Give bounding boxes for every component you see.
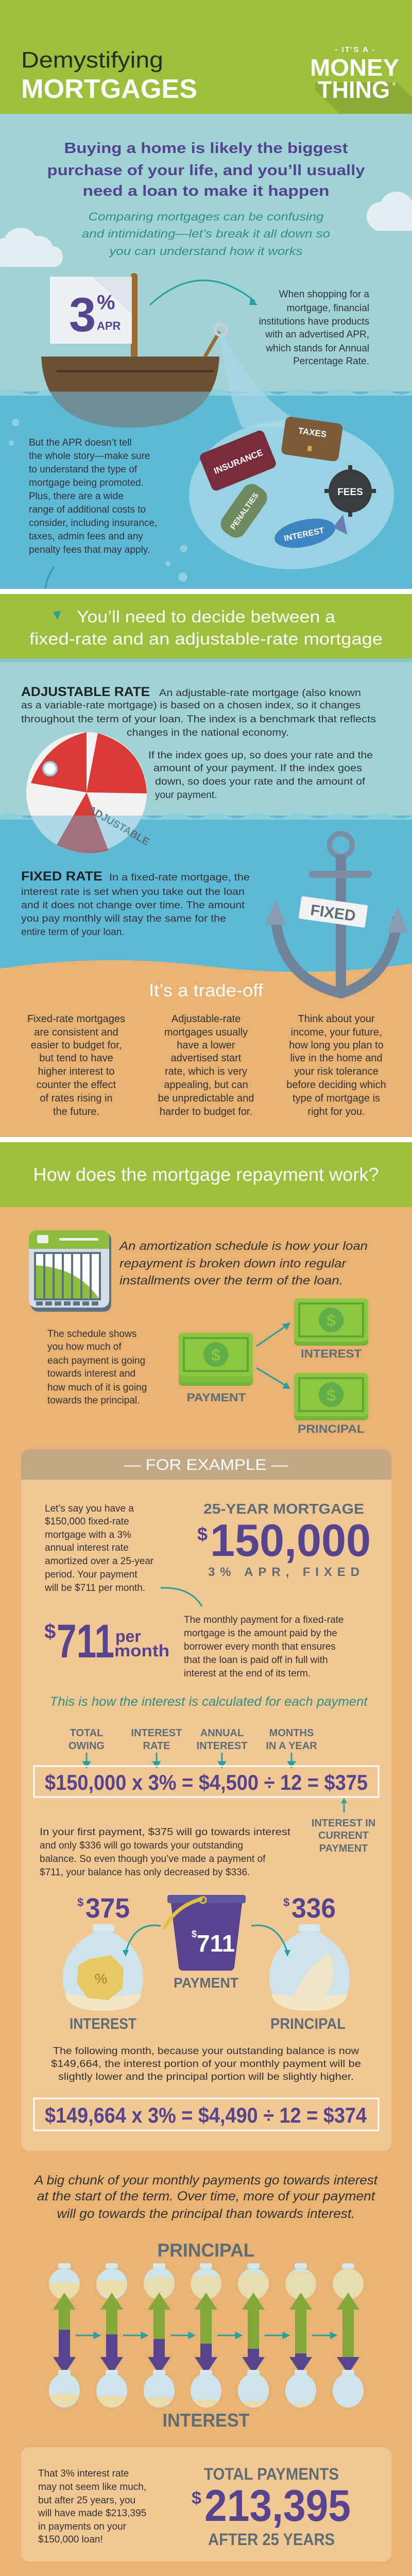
text: fixed rate: and it does not change over time. The amount bbox=[21, 900, 245, 911]
trade-off columns: harder to budget for. bbox=[160, 1106, 252, 1117]
text: APR definition: mortgage, financial bbox=[286, 303, 369, 314]
subtitle: you can understand how it works bbox=[108, 245, 302, 258]
subtitle: and intimidating—let’s break it all down so bbox=[82, 227, 330, 240]
text: monthly payment definition: mortgage is the amount paid by the bbox=[184, 1628, 337, 1639]
heading: trade-off: It’s a trade-off bbox=[149, 981, 264, 1001]
text: APR definition: Percentage Rate. bbox=[293, 356, 369, 367]
text: APR caveat: Plus, there are a wide bbox=[29, 491, 124, 502]
panel: total payments: may not seem like much, bbox=[38, 2482, 146, 2493]
panel: total payments: $150,000 loan! bbox=[38, 2534, 103, 2545]
diagram: bucket split into jars: $ bbox=[283, 1896, 289, 1909]
text: big chunk goes to interest bbox=[33, 2173, 378, 2221]
trade-off columns: but tend to have bbox=[39, 1053, 113, 1064]
water section bbox=[0, 389, 412, 589]
text: adjustable rate: changes in the national economy. bbox=[127, 727, 289, 738]
trade-off columns: appealing, but can bbox=[164, 1079, 248, 1091]
title bbox=[21, 47, 197, 104]
text: adjustable rate: If the index goes up, so does your rate and the bbox=[148, 750, 373, 761]
text: amortization definition: installments over the term of the loan. bbox=[119, 1274, 343, 1287]
text: APR caveat: taxes, admin fees and any bbox=[29, 531, 143, 542]
trade-off columns bbox=[27, 1013, 386, 1117]
icon: anchor with FIXED sign: FIXED bbox=[310, 902, 357, 925]
arrow + label: interest in current payment: INTEREST IN bbox=[312, 1818, 375, 1829]
formula labels bbox=[68, 1727, 317, 1752]
text: adjustable rate: An adjustable-rate mortgage (also known bbox=[159, 688, 361, 699]
trade-off columns: be unpredictable and bbox=[158, 1093, 254, 1104]
formula labels: TOTAL bbox=[70, 1727, 103, 1739]
formula box 1: $150,000 x 3% = $4,500 ÷ 12 = $375 bbox=[45, 1770, 368, 1794]
stat: 150,000 mortgage: 25-YEAR MORTGAGE bbox=[203, 1501, 364, 1517]
text: first payment: In your first payment, $375 will go towards interest bbox=[40, 1827, 291, 1838]
text: adjustable rate: down, so does your rate and the amount of bbox=[155, 776, 366, 787]
chart: principal vs interest over time: INTEREST bbox=[163, 2410, 250, 2431]
arrow + label: interest in current payment bbox=[312, 1798, 375, 1854]
formula labels: OWING bbox=[68, 1740, 105, 1752]
panel: total payments: AFTER 25 YEARS bbox=[208, 2530, 335, 2549]
panel: total payments: TOTAL PAYMENTS bbox=[204, 2465, 339, 2483]
arrow: to monthly payment bbox=[161, 1588, 202, 1606]
trade-off columns: before deciding which bbox=[286, 1079, 386, 1091]
text: monthly payment definition: The monthly payment for a fixed-rate bbox=[184, 1615, 344, 1625]
diagram: payment splits into interest and principal: PRINCIPAL bbox=[298, 1422, 365, 1435]
panel: total payments: will have made $213,395 bbox=[38, 2508, 146, 2519]
trade-off columns: are consistent and bbox=[34, 1027, 118, 1038]
text: APR caveat: penalty fees that may apply. bbox=[29, 545, 150, 555]
text: APR definition: institutions have products bbox=[259, 316, 369, 327]
band: fixed vs adjustable heading: fixed-rate and an adjustable-rate mortgage bbox=[29, 630, 383, 648]
icon: interest jar bbox=[63, 1924, 143, 2032]
text: monthly payment definition bbox=[184, 1615, 344, 1679]
formula labels: IN A YEAR bbox=[266, 1740, 317, 1752]
text: schedule explanation bbox=[47, 1329, 147, 1406]
trade-off columns: of rates rising in bbox=[40, 1093, 113, 1104]
subtitle bbox=[82, 210, 330, 258]
sky section bbox=[0, 114, 412, 392]
icon: sailboat with 3% APR sail: % bbox=[97, 291, 115, 314]
text: monthly payment definition: borrower every month that ensures bbox=[184, 1641, 336, 1652]
stat: 711 per month: month bbox=[114, 1641, 169, 1660]
trade-off columns: rate, which is very bbox=[165, 1066, 247, 1077]
trade-off columns: mortgages usually bbox=[164, 1027, 248, 1038]
icon: hidden costs bubble bbox=[189, 335, 394, 569]
formula labels: ANNUAL bbox=[200, 1727, 244, 1739]
icon: interest fish bbox=[272, 512, 348, 553]
trade-off columns: right for you. bbox=[307, 1106, 365, 1117]
text: first payment bbox=[40, 1827, 291, 1878]
icon: interest jar: % bbox=[95, 1971, 108, 1987]
chart: principal vs interest over time bbox=[49, 2240, 364, 2431]
text: example setup: Let’s say you have a bbox=[45, 1503, 134, 1514]
formula labels: RATE bbox=[143, 1740, 170, 1752]
trade-off columns: Fixed-rate mortgages bbox=[27, 1013, 125, 1025]
text: example setup: annual interest rate bbox=[45, 1543, 129, 1553]
arrow: down to fixed vs adjustable bbox=[45, 567, 56, 616]
band: repayment heading bbox=[0, 1137, 412, 1207]
text: big chunk goes to interest: at the start of the term. Over time, more of your payment bbox=[37, 2189, 375, 2204]
arrow + label: interest in current payment: CURRENT bbox=[318, 1830, 369, 1841]
text: fixed rate bbox=[21, 869, 250, 938]
text: APR caveat: to understand the type of bbox=[29, 464, 138, 475]
trade-off columns: how long you plan to bbox=[289, 1040, 384, 1051]
logo: It's a Money Thing: - IT'S A - bbox=[335, 45, 376, 54]
text: adjustable rate: amount of your payment. If the index goes bbox=[153, 763, 362, 774]
trade-off columns: Think about your bbox=[298, 1013, 375, 1025]
arrow: sail to APR text bbox=[150, 280, 255, 305]
icon: clouds bbox=[0, 192, 412, 267]
text: APR definition: with an advertised APR, bbox=[265, 329, 369, 340]
text: schedule explanation: towards interest and bbox=[47, 1368, 135, 1379]
diagram: payment splits into interest and principal: INTEREST bbox=[301, 1347, 362, 1360]
text: schedule explanation: how much of it is going bbox=[47, 1382, 147, 1393]
icon: fees mine: FEES bbox=[337, 487, 363, 498]
title: MORTGAGES bbox=[21, 74, 197, 104]
trade-off columns: higher interest to bbox=[38, 1066, 114, 1077]
band: repayment heading: How does the mortgage repayment work? bbox=[33, 1164, 379, 1185]
text: example setup: will be $711 per month. bbox=[44, 1583, 145, 1594]
panel: total payments: but after 25 years, you bbox=[38, 2495, 135, 2506]
stat: 150,000 mortgage: 150,000 bbox=[210, 1515, 371, 1566]
band: fixed vs adjustable heading: You’ll need to decide between a bbox=[77, 607, 335, 626]
panel: total payments: in payments on your bbox=[38, 2521, 127, 2532]
text: adjustable rate: ADJUSTABLE RATE bbox=[21, 685, 150, 699]
panel: total payments: 213,395 bbox=[204, 2481, 351, 2531]
text: adjustable rate: your payment. bbox=[155, 790, 217, 801]
text: fixed rate: you pay monthly will stay the same for the bbox=[21, 913, 226, 924]
headline bbox=[47, 140, 365, 199]
text: big chunk goes to interest: A big chunk of your monthly payments go towards interest bbox=[33, 2173, 378, 2188]
headline: purchase of your life, and you’ll usually bbox=[47, 162, 365, 179]
trade-off columns: your risk tolerance bbox=[294, 1066, 379, 1077]
icon: sailboat with 3% APR sail: APR bbox=[97, 319, 121, 332]
subtitle: Comparing mortgages can be confusing bbox=[89, 210, 324, 223]
diagram: bucket split into jars: 375 bbox=[85, 1893, 130, 1924]
text: APR caveat: But the APR doesn’t tell bbox=[29, 437, 132, 448]
icon: principal jar bbox=[269, 1924, 350, 2032]
text: monthly payment definition: interest at the end of its term. bbox=[184, 1668, 311, 1679]
formula labels: INTEREST bbox=[131, 1727, 182, 1739]
text: monthly payment definition: that the loan is paid off in full with bbox=[184, 1655, 328, 1666]
stat: 711 per month: $ bbox=[44, 1620, 56, 1643]
headline: need a loan to make it happen bbox=[82, 183, 330, 199]
logo: It's a Money Thing: THING bbox=[318, 76, 390, 103]
text: schedule explanation: you how much of bbox=[47, 1342, 122, 1352]
text: following month: The following month, because your outstanding balance is now bbox=[53, 2046, 359, 2057]
icon: beach ball: ADJUSTABLE bbox=[87, 804, 151, 848]
panel: for example bbox=[21, 1449, 391, 2151]
icon: bucket bbox=[164, 1895, 246, 1991]
text: amortization definition bbox=[118, 1239, 368, 1287]
icon: bucket: 711 bbox=[197, 1930, 235, 1957]
sand bbox=[0, 960, 412, 1137]
text: big chunk goes to interest: will go towards the principal than towards interest. bbox=[57, 2207, 355, 2221]
trade-off columns: live in the home and bbox=[290, 1053, 383, 1064]
text: amortization definition: repayment is broken down into regular bbox=[119, 1257, 347, 1270]
text: APR definition: which stands for Annual bbox=[265, 343, 369, 354]
text: adjustable rate: as a variable-rate mortgage) is based on a chosen index, so it changes bbox=[21, 700, 360, 711]
header band bbox=[0, 0, 412, 114]
text: following month: $149,664, the interest portion of your monthly payment will be bbox=[51, 2059, 361, 2070]
icon: sailboat with 3% APR sail: 3 bbox=[69, 287, 96, 342]
diagram: bucket split into jars bbox=[63, 1893, 350, 2032]
text: fixed rate: FIXED RATE bbox=[21, 869, 102, 884]
stat: 150,000 mortgage: 3% APR, FIXED bbox=[208, 1565, 359, 1579]
formula labels: INTEREST bbox=[197, 1740, 247, 1752]
logo: It's a Money Thing: MONEY bbox=[310, 54, 399, 81]
title: Demystifying bbox=[21, 47, 163, 73]
chart: principal vs interest over time: PRINCIPAL bbox=[158, 2240, 254, 2261]
text: APR caveat bbox=[29, 437, 157, 555]
text: schedule explanation: towards the principal. bbox=[47, 1395, 140, 1406]
band: fixed vs adjustable heading bbox=[0, 589, 412, 658]
text: schedule explanation: The schedule shows bbox=[47, 1329, 136, 1340]
text: APR definition: When shopping for a bbox=[279, 289, 369, 300]
diagram: payment splits into interest and principal: PAYMENT bbox=[186, 1391, 246, 1404]
icon: interest jar: INTEREST bbox=[70, 2015, 136, 2032]
text: APR caveat: the whole story—make sure bbox=[29, 451, 150, 462]
text: fixed rate: In a fixed-rate mortgage, the bbox=[109, 872, 250, 883]
panel: total payments: $ bbox=[192, 2488, 201, 2508]
icon: interest fish: INTEREST bbox=[283, 526, 325, 543]
diagram: bucket split into jars: 336 bbox=[291, 1893, 336, 1924]
icon: penalties vase: PENALTIES bbox=[229, 491, 261, 531]
text: APR caveat: mortgage being promoted. bbox=[29, 478, 144, 488]
text: adjustable rate: throughout the term of your loan. The index is a benchmark that reflects bbox=[21, 714, 376, 725]
formula box 2: $149,664 x 3% = $4,490 ÷ 12 = $374 bbox=[45, 2103, 367, 2127]
icon: fees mine bbox=[324, 465, 376, 517]
text: APR caveat: range of additional costs to bbox=[29, 504, 146, 515]
stat: 711 per month bbox=[44, 1615, 169, 1668]
text: example setup: mortgage with a 3% bbox=[45, 1530, 131, 1540]
icon: insurance barrel bbox=[198, 429, 278, 492]
trade-off columns: easier to budget for, bbox=[31, 1040, 122, 1051]
trade-off columns: counter the effect bbox=[37, 1079, 116, 1091]
icon: bucket: $ bbox=[192, 1929, 197, 1939]
icon: penalties vase bbox=[217, 480, 271, 541]
panel: total payments bbox=[21, 2447, 391, 2562]
text: example setup: amortized over a 25-year bbox=[45, 1556, 154, 1567]
text: schedule explanation: each payment is going bbox=[47, 1355, 145, 1366]
trade-off columns: income, your future, bbox=[291, 1027, 382, 1038]
text: first payment: and only $336 will go towards your outstanding bbox=[40, 1840, 243, 1851]
heading: interest calculation: This is how the interest is calculated for each payment bbox=[49, 1694, 368, 1709]
arrow + label: interest in current payment: PAYMENT bbox=[319, 1843, 368, 1854]
text: fixed rate: entire term of your loan. bbox=[21, 927, 125, 938]
headline: Buying a home is likely the biggest bbox=[64, 140, 348, 157]
stat: 711 per month: per bbox=[115, 1627, 141, 1646]
icon: beach ball bbox=[26, 732, 151, 853]
formula labels: MONTHS bbox=[269, 1727, 314, 1739]
heading: for example: — FOR EXAMPLE — bbox=[124, 1456, 288, 1473]
text: APR caveat: consider, including insurance, bbox=[29, 518, 157, 529]
logo: It's a Money Thing bbox=[310, 45, 399, 103]
text: following month: slightly lower and the principal portion will be slightly higher. bbox=[58, 2072, 354, 2082]
text: first payment: balance. So even though you’ve made a payment of bbox=[40, 1854, 266, 1865]
trade-off columns: Adjustable-rate bbox=[171, 1013, 241, 1025]
bubbles bbox=[9, 419, 187, 582]
icon: principal jar: PRINCIPAL bbox=[270, 2015, 346, 2032]
trade-off columns: the future. bbox=[53, 1106, 99, 1117]
water 2 bbox=[0, 813, 412, 975]
text: following month bbox=[51, 2046, 361, 2082]
text: adjustable rate bbox=[21, 685, 376, 801]
diagram: bucket split into jars: $ bbox=[77, 1896, 83, 1909]
icon: taxes chest bbox=[281, 416, 343, 462]
text: amortization definition: An amortization schedule is how your loan bbox=[118, 1239, 368, 1252]
stat: 150,000 mortgage bbox=[197, 1501, 371, 1579]
stat: 711 per month: 711 bbox=[57, 1615, 114, 1668]
text: example setup: period. Your payment bbox=[45, 1569, 138, 1580]
stat: 150,000 mortgage: $ bbox=[197, 1523, 208, 1545]
icon: anchor with FIXED sign bbox=[265, 834, 408, 993]
text: example setup bbox=[44, 1503, 154, 1594]
icon: amortization schedule bbox=[29, 1230, 111, 1312]
icon: sailboat with 3% APR sail bbox=[41, 273, 227, 428]
icon: taxes chest: TAXES bbox=[298, 426, 327, 439]
text: APR definition bbox=[259, 289, 369, 367]
text: fixed rate: interest rate is set when you take out the loan bbox=[21, 887, 245, 897]
trade-off columns: have a lower bbox=[177, 1040, 235, 1051]
formula box 2 bbox=[34, 2098, 379, 2130]
text: example setup: $150,000 fixed-rate bbox=[45, 1516, 129, 1527]
trade-off columns: advertised start bbox=[171, 1053, 242, 1064]
icon: bucket: PAYMENT bbox=[174, 1975, 238, 1991]
diagram: payment splits into interest and principal bbox=[179, 1298, 368, 1435]
text: first payment: $711, your balance has only decreased by $336. bbox=[40, 1867, 250, 1878]
icon: insurance barrel: INSURANCE bbox=[213, 448, 264, 476]
panel: total payments: That 3% interest rate bbox=[38, 2468, 129, 2479]
trade-off columns: type of mortgage is bbox=[293, 1093, 380, 1104]
logo: It's a Money Thing: ® bbox=[392, 81, 396, 87]
